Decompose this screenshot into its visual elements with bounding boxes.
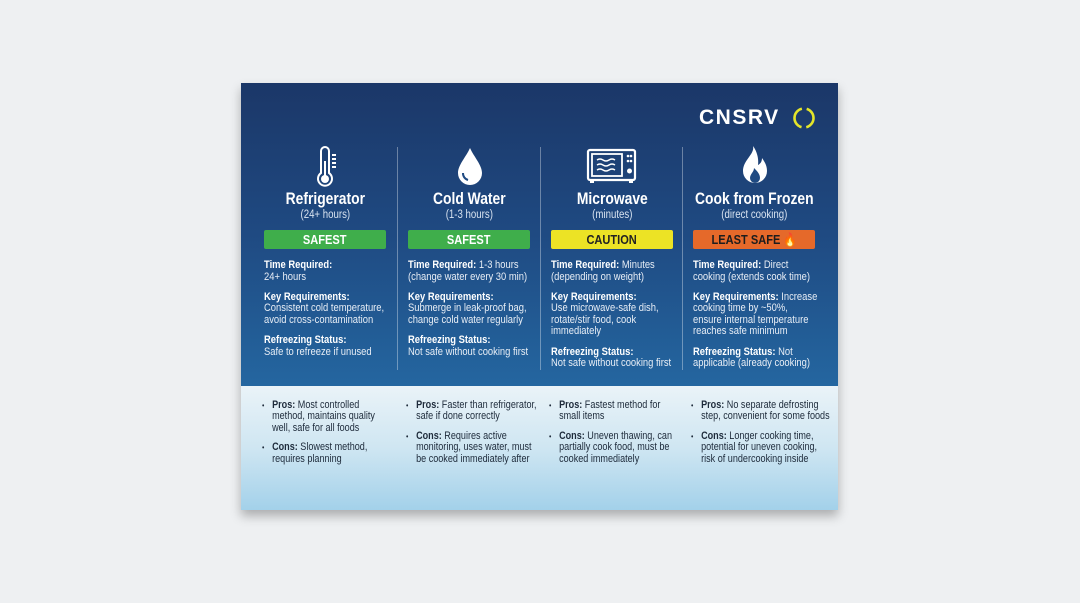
card: Time Required: 1-3 hours [408, 259, 519, 271]
pros/cons: cold water [406, 399, 537, 465]
badge: least safe: LEAST SAFE 🔥 [711, 232, 797, 247]
pros/cons: cold water: Pros: Faster than refrigerator, [416, 399, 537, 411]
card: Refrigerator [286, 190, 365, 208]
card: 24+ hours [264, 271, 306, 283]
badge: safest [408, 230, 530, 249]
pros/cons: cook from frozen: step, convenient for some foods [701, 410, 830, 422]
card: Refreezing Status: [551, 346, 634, 358]
pros/cons: refrigerator: Pros: Most controlled [272, 399, 359, 411]
icon: flame [743, 146, 767, 183]
card: Cold Water [433, 190, 506, 208]
icon: thermometer [317, 146, 336, 187]
card: reaches safe minimum [693, 325, 788, 337]
pros/cons: cook from frozen: potential for uneven cooking, [701, 441, 817, 453]
icon: microwave [586, 148, 636, 183]
pros/cons: refrigerator [262, 399, 375, 465]
card: Submerge in leak-proof bag, [408, 302, 527, 314]
card: Key Requirements: [551, 291, 637, 303]
card: Use microwave-safe dish, [551, 302, 659, 314]
card: Refreezing Status: [264, 334, 347, 346]
card: Time Required: [264, 259, 332, 271]
pros/cons: microwave: partially cook food, must be [559, 441, 669, 453]
pros/cons: microwave: cooked immediately [559, 453, 639, 465]
card: Key Requirements: Increase [693, 291, 817, 303]
card: (24+ hours) [300, 209, 350, 221]
pros/cons: microwave: Pros: Fastest method for [559, 399, 660, 411]
logo [699, 106, 815, 129]
pros/cons: refrigerator: method, maintains quality [272, 410, 375, 422]
pros/cons: cold water: safe if done correctly [416, 410, 500, 422]
pros/cons: cook from frozen: Pros: No separate defrosting [701, 399, 819, 411]
card: (depending on weight) [551, 271, 644, 283]
badge: safest: SAFEST [303, 232, 347, 247]
card: Refreezing Status: [408, 334, 491, 346]
card: (1-3 hours) [446, 209, 493, 221]
card: Cook from Frozen [695, 190, 814, 208]
card: Consistent cold temperature, [264, 302, 384, 314]
icon: water drop [458, 148, 482, 185]
badge: least safe [693, 230, 815, 249]
pros/cons: microwave: Cons: Uneven thawing, can [559, 430, 672, 442]
card: Not safe without cooking first [551, 357, 671, 369]
card [241, 83, 838, 510]
column: cook from frozen [693, 146, 817, 369]
badge: caution [551, 230, 673, 249]
card: (direct cooking) [721, 209, 787, 221]
pros/cons: microwave: small items [559, 410, 604, 422]
card: applicable (already cooking) [693, 357, 810, 369]
card: Safe to refreeze if unused [264, 346, 372, 358]
pros/cons: cook from frozen: Cons: Longer cooking time, [701, 430, 813, 442]
pros/cons: refrigerator: well, safe for all foods [272, 422, 359, 434]
card: Refreezing Status: Not [693, 346, 793, 358]
column: cold water [408, 148, 530, 358]
card: Time Required: Minutes [551, 259, 655, 271]
card: rotate/stir food, cook [551, 314, 636, 326]
column: refrigerator [264, 146, 386, 358]
card: avoid cross-contamination [264, 314, 373, 326]
badge: safest: SAFEST [447, 232, 491, 247]
card: Time Required: Direct [693, 259, 788, 271]
pros/cons: cook from frozen: risk of undercooking inside [701, 453, 808, 465]
card: immediately [551, 325, 601, 337]
card: Microwave [577, 190, 648, 208]
card: Key Requirements: [408, 291, 494, 303]
card: Key Requirements: [264, 291, 350, 303]
pros/cons: cold water: be cooked immediately after [416, 453, 530, 465]
pros/cons: refrigerator: requires planning [272, 453, 342, 465]
card: (change water every 30 min) [408, 271, 527, 283]
pros/cons: cold water: monitoring, uses water, must [416, 441, 532, 453]
pros/cons: microwave [549, 399, 672, 465]
card: cooking time by ~50%, [693, 302, 788, 314]
card: cooking (extends cook time) [693, 271, 810, 283]
pros/cons: cook from frozen [691, 399, 830, 465]
logo: CNSRV [699, 106, 780, 129]
column: microwave [551, 148, 673, 369]
pros/cons: cold water: Cons: Requires active [416, 430, 507, 442]
pros/cons: refrigerator: Cons: Slowest method, [272, 441, 367, 453]
card: Not safe without cooking first [408, 346, 528, 358]
badge: safest [264, 230, 386, 249]
card: (minutes) [592, 209, 632, 221]
card: ensure internal temperature [693, 314, 808, 326]
badge: caution: CAUTION [587, 232, 637, 247]
card: change cold water regularly [408, 314, 523, 326]
